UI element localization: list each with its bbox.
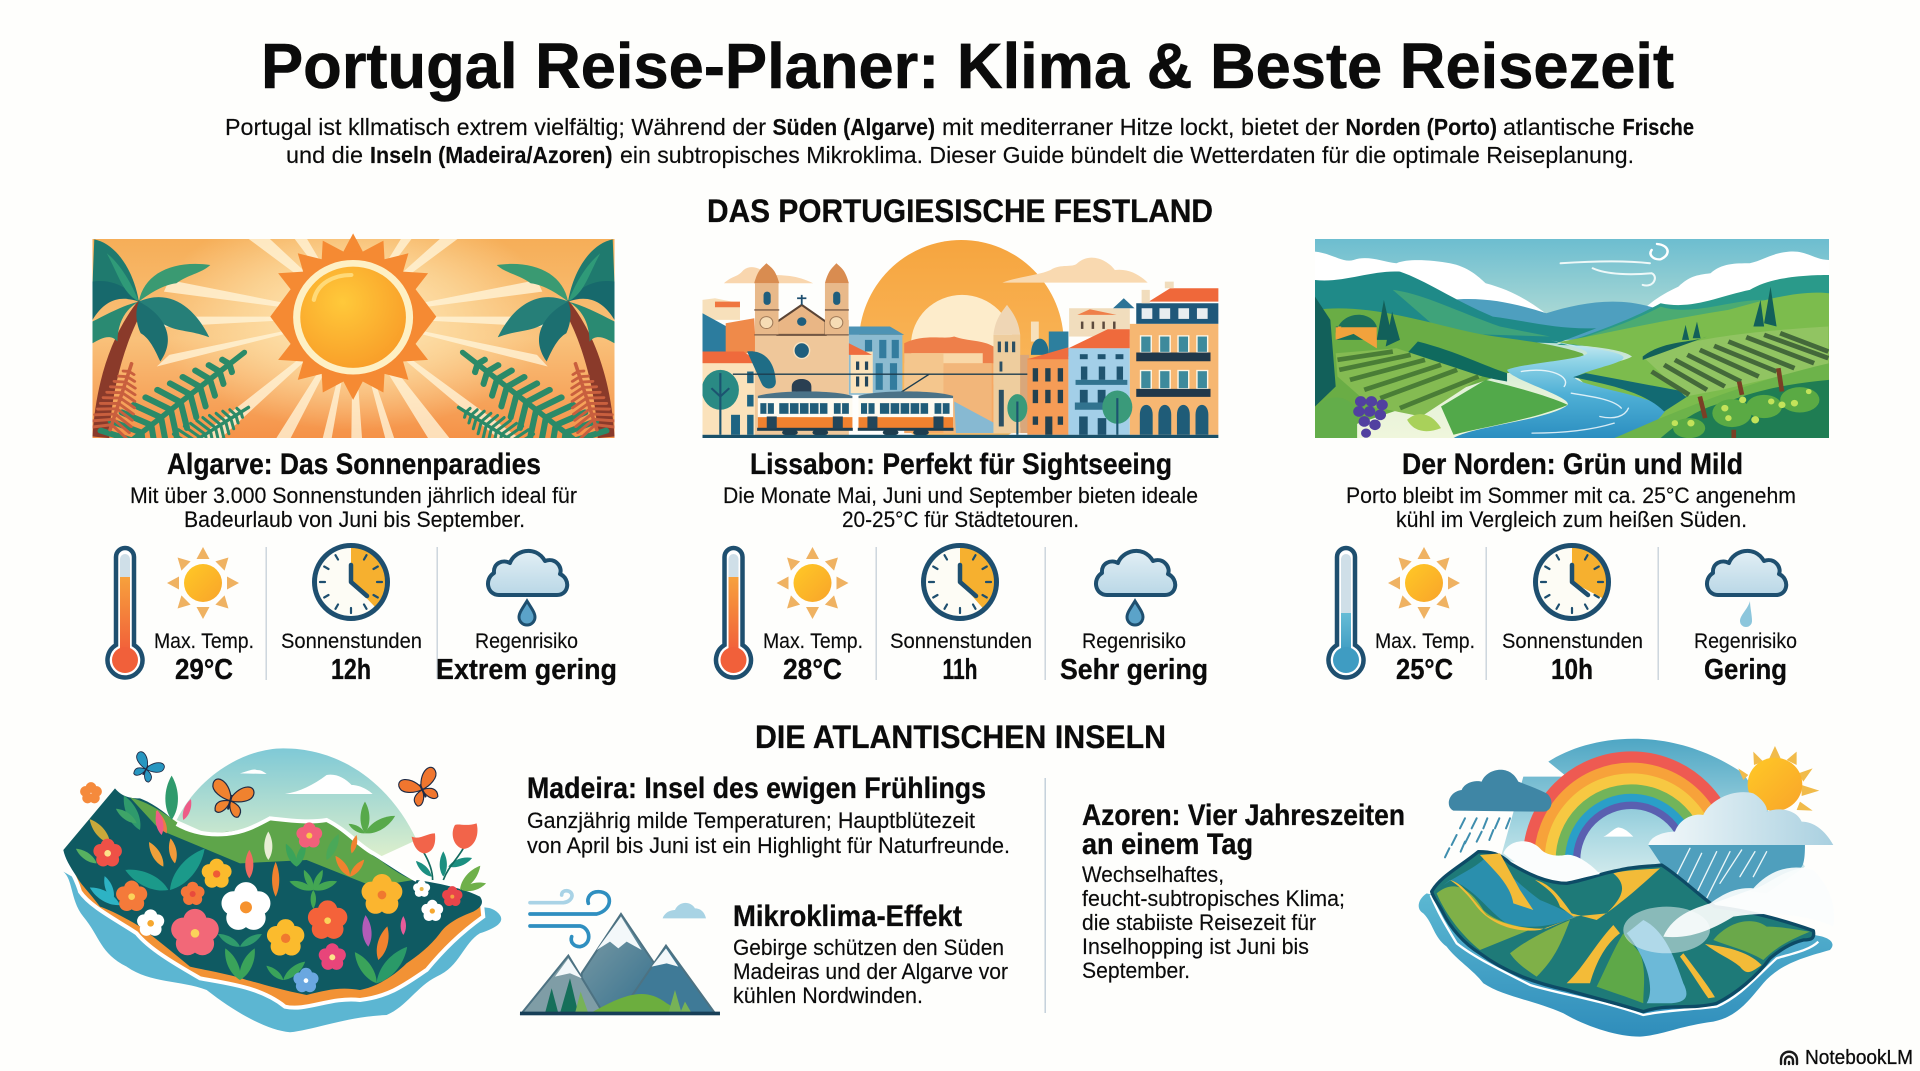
intro text bbox=[225, 114, 1694, 168]
description: Ganzjährig milde Temperaturen; Hauptblütezeit bbox=[527, 808, 975, 833]
mist bbox=[1623, 907, 1710, 953]
description: kühl im Vergleich zum heißen Süden. bbox=[1396, 507, 1747, 532]
island bbox=[1432, 852, 1814, 1012]
sky bbox=[1500, 739, 1805, 893]
icon: sun bbox=[167, 547, 239, 619]
stat: max temperature bbox=[154, 547, 254, 686]
illustration: Algarve sun and palms bbox=[92, 234, 614, 438]
heading: islands: DIE ATLANTISCHEN INSELN bbox=[755, 719, 1166, 755]
stat: max temperature: 29°C bbox=[175, 654, 233, 686]
icon: cloud with drop bbox=[1096, 551, 1175, 625]
sun bbox=[1738, 746, 1819, 811]
trams bbox=[757, 391, 853, 436]
wire bbox=[732, 374, 1028, 392]
stat: max temperature: 25°C bbox=[1396, 654, 1453, 686]
intro text: mit mediterraner Hitze lockt, bietet der bbox=[942, 114, 1339, 140]
stat: rain risk bbox=[436, 551, 617, 686]
heading: mainland: DAS PORTUGIESISCHE FESTLAND bbox=[707, 193, 1213, 229]
island bbox=[63, 788, 482, 995]
heading: Der Norden: Grün und Mild bbox=[1402, 448, 1743, 481]
heading: Madeira: Insel des ewigen Frühlings bbox=[527, 772, 986, 805]
intro text: Norden (Porto) bbox=[1346, 114, 1497, 140]
description: Die Monate Mai, Juni und September bieten ideale bbox=[723, 483, 1198, 508]
left houses bbox=[702, 298, 740, 320]
heading: Azoren: Vier Jahreszeiten bbox=[1082, 799, 1405, 832]
stat: rain risk: Regenrisiko bbox=[1082, 629, 1186, 653]
description: Wechselhaftes, bbox=[1082, 862, 1224, 887]
brand: NotebookLM: NotebookLM bbox=[1805, 1047, 1913, 1069]
intro text: Süden (Algarve) bbox=[772, 114, 935, 140]
illustration: Douro valley vineyards bbox=[1315, 238, 1829, 440]
intro text: Inseln (Madeira/Azoren) bbox=[370, 142, 612, 168]
stat: sun hours: Sonnenstunden bbox=[1502, 629, 1643, 653]
description: Mit über 3.000 Sonnenstunden jährlich ideal für bbox=[130, 483, 577, 508]
icon: clock bbox=[924, 546, 996, 618]
heading: Mikroklima-Effekt bbox=[733, 900, 962, 933]
icon: thermometer warm bbox=[716, 548, 751, 678]
intro text: Portugal ist kllmatisch extrem vielfältig; Während der bbox=[225, 114, 766, 140]
description: die stabiiste Reisezeit für bbox=[1082, 910, 1316, 935]
rainbow bbox=[1529, 757, 1734, 860]
stat: sun hours: 10h bbox=[1551, 654, 1593, 686]
heading bbox=[1082, 799, 1405, 861]
stat: rain risk: Regenrisiko bbox=[1694, 629, 1797, 653]
stat: sun hours: Sonnenstunden bbox=[890, 629, 1032, 653]
title: Portugal Reise-Planer: Klima & Beste Reisezeit bbox=[261, 30, 1674, 102]
description bbox=[130, 483, 577, 532]
stat: max temperature bbox=[763, 547, 863, 686]
left palm and fern bbox=[92, 239, 250, 438]
description bbox=[527, 808, 1010, 858]
stat: rain risk: Sehr gering bbox=[1060, 654, 1208, 686]
stat: max temperature: 28°C bbox=[783, 654, 842, 686]
description: Porto bleibt im Sommer mit ca. 25°C angenehm bbox=[1346, 483, 1796, 508]
icon: cloud with drop bbox=[1707, 551, 1786, 627]
rain bbox=[1662, 848, 1767, 905]
heading: an einem Tag bbox=[1082, 828, 1253, 861]
icon: clock bbox=[314, 546, 388, 618]
panel: Der Norden bbox=[1315, 238, 1829, 686]
flowers bbox=[80, 782, 477, 992]
text: Mikroklima bbox=[733, 900, 1008, 1008]
illustration: Madeira flower island bbox=[63, 748, 501, 1032]
dark cloud and rain bbox=[1449, 770, 1551, 812]
right houses bbox=[1027, 358, 1068, 435]
stat: max temperature: Max. Temp. bbox=[1375, 629, 1475, 653]
soil bbox=[64, 850, 483, 1008]
butterflies bbox=[128, 750, 446, 820]
text: Azoren bbox=[1082, 799, 1405, 983]
heading: Lissabon: Perfekt für Sightseeing bbox=[750, 448, 1172, 481]
panel: Lissabon bbox=[702, 240, 1218, 686]
white cloud bbox=[1648, 792, 1833, 845]
icon: clock bbox=[1536, 546, 1608, 618]
stat: rain risk: Gering bbox=[1704, 654, 1787, 686]
icon: cloud with drop bbox=[488, 551, 567, 625]
intro text: atlantische bbox=[1503, 114, 1615, 140]
icon: wind and mountains bbox=[520, 891, 720, 1015]
description: kühlen Nordwinden. bbox=[733, 983, 923, 1008]
intro text: und die bbox=[286, 142, 363, 168]
mid buildings bbox=[849, 335, 902, 395]
bell tower bbox=[993, 335, 1020, 433]
trees bbox=[702, 370, 739, 410]
illustration: Azores island with rainbow bbox=[1419, 739, 1834, 1037]
stat: sun hours bbox=[890, 546, 1032, 686]
description: 20-25°C für Städtetouren. bbox=[842, 507, 1079, 532]
right palm and fern bbox=[456, 239, 614, 438]
description: September. bbox=[1082, 958, 1190, 983]
icon: thermometer hot bbox=[108, 548, 143, 678]
description: Badeurlaub von Juni bis September. bbox=[184, 507, 525, 532]
illustration: Lisbon city and trams bbox=[702, 240, 1218, 446]
stat: rain risk: Regenrisiko bbox=[475, 629, 578, 653]
description bbox=[1082, 862, 1345, 983]
description: Madeiras und der Algarve vor bbox=[733, 959, 1008, 984]
stat: max temperature: Max. Temp. bbox=[763, 629, 863, 653]
description: von April bis Juni ist ein Highlight für Naturfreunde. bbox=[527, 833, 1010, 858]
description bbox=[723, 483, 1198, 532]
stat: sun hours: Sonnenstunden bbox=[281, 629, 422, 653]
sky dome bbox=[177, 748, 417, 860]
panel: Algarve bbox=[91, 203, 617, 686]
description: Gebirge schützen den Süden bbox=[733, 935, 1004, 960]
icon: thermometer cool bbox=[1328, 548, 1364, 678]
intro text: ein subtropisches Mikroklima. Dieser Guide bündelt die Wetterdaten für die optimale Reiseplanung. bbox=[620, 142, 1634, 168]
stat: max temperature bbox=[1375, 547, 1475, 686]
stat: sun hours bbox=[1502, 546, 1643, 686]
description: feucht-subtropisches Klima; bbox=[1082, 886, 1345, 911]
stat: sun hours: 11h bbox=[942, 654, 978, 686]
text: Madeira bbox=[527, 772, 1010, 858]
rain backdrop bbox=[1648, 845, 1805, 903]
description bbox=[1346, 483, 1796, 532]
leaves bbox=[74, 776, 487, 988]
description: Inselhopping ist Juni bis bbox=[1082, 934, 1309, 959]
stat: rain risk bbox=[1060, 551, 1208, 686]
intro text: Frische bbox=[1622, 114, 1694, 140]
church bbox=[755, 320, 849, 436]
sea bbox=[1419, 893, 1833, 1037]
icon: sun bbox=[776, 547, 848, 619]
stat: sun hours: 12h bbox=[331, 654, 371, 686]
icon: sun bbox=[1388, 547, 1460, 619]
stat: max temperature: Max. Temp. bbox=[154, 629, 254, 653]
tulip stems bbox=[423, 848, 463, 880]
icon: NotebookLM logo bbox=[1781, 1052, 1797, 1064]
stat: rain risk bbox=[1694, 551, 1797, 686]
stat: sun hours bbox=[281, 546, 422, 686]
stat: rain risk: Extrem gering bbox=[436, 654, 617, 686]
heading: Algarve: Das Sonnenparadies bbox=[167, 448, 541, 481]
water bbox=[63, 872, 501, 1032]
description bbox=[733, 935, 1008, 1008]
